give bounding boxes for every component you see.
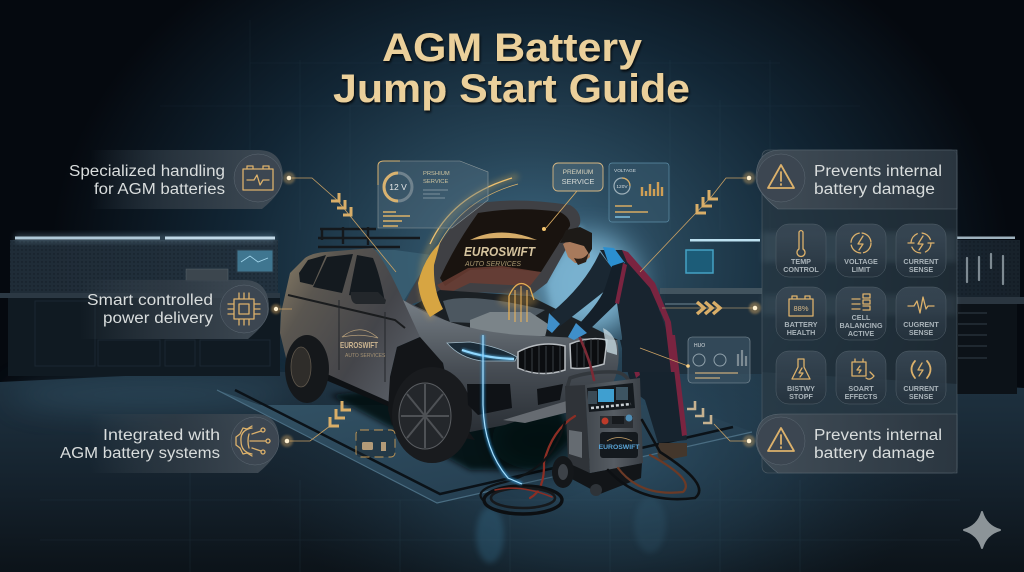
callout: prevents damage top: Prevents internal <box>814 163 942 180</box>
grille <box>518 339 607 374</box>
callout: integrated with systems: Integrated with <box>103 427 220 444</box>
tile: distway stop: STOPF <box>789 392 814 401</box>
boot <box>658 443 687 461</box>
HUD: 12 V gauge: PRSHIUM <box>423 171 450 177</box>
gold energy swirl over the battery <box>498 284 538 322</box>
glowing blue cable <box>483 335 522 484</box>
front right highlight <box>603 328 617 355</box>
back glow behind the hood <box>542 235 638 335</box>
tile: smart effects: EFFECTS <box>845 392 878 401</box>
connector: top left <box>283 172 396 272</box>
tile: distway stop <box>776 351 826 404</box>
raised hood <box>403 200 580 307</box>
callout: smart controlled power: Smart controlled <box>87 292 213 309</box>
raised hood: AUTO SERVICES <box>464 261 521 268</box>
tile: smart effects <box>836 351 886 404</box>
tile: voltage limit: VOLTAGE <box>844 257 878 266</box>
callout: integrated with systems <box>60 414 279 473</box>
panel: protections <box>756 150 957 473</box>
callout: prevents damage bottom: Prevents internal <box>814 427 942 444</box>
connector: bottom right <box>687 401 755 447</box>
torso <box>600 250 675 372</box>
background: floor <box>0 372 1024 572</box>
handle <box>567 372 630 388</box>
HUD: premium service: PREMIUM <box>563 169 593 176</box>
icon: warning triangle <box>757 154 805 202</box>
engine bay <box>403 290 618 345</box>
head <box>563 241 590 263</box>
gloves <box>547 313 560 333</box>
tile: temp control: TEMP <box>791 257 811 266</box>
sill step <box>316 370 392 408</box>
car shadow <box>330 385 570 470</box>
car <box>280 200 619 463</box>
tile: current sense bolt <box>896 351 946 404</box>
floor platform <box>217 390 752 503</box>
callout: prevents damage bottom: battery damage <box>814 445 935 462</box>
tile: current sense bolt: CURRENT <box>903 384 939 393</box>
tile: distway stop: BISTWY <box>787 384 815 393</box>
cables <box>480 338 699 514</box>
callout: prevents damage top: battery damage <box>814 181 935 198</box>
rear wheel <box>285 335 329 403</box>
tile: temp control: CONTROL <box>783 265 819 274</box>
tile: current sense 1 <box>896 224 946 277</box>
jump starter unit: EUROSWIFT <box>599 444 640 451</box>
side trim <box>288 295 405 328</box>
headlight <box>447 342 517 361</box>
connector: mid right <box>662 302 761 314</box>
tile: cell balancing: ACTIVE <box>848 329 874 338</box>
mechanic <box>547 227 687 461</box>
unit side face <box>565 385 590 473</box>
tile: voltage limit: LIMIT <box>852 265 871 274</box>
HUD: 12 V gauge: 12 V <box>389 182 407 192</box>
icon: battery <box>234 154 282 202</box>
HUD: lower right <box>688 337 750 383</box>
raised hood: EUROSWIFT <box>464 245 536 259</box>
front wheel <box>392 367 472 463</box>
connector: premium service to hood <box>542 191 577 231</box>
callout: integrated with systems: AGM battery systems <box>60 445 220 462</box>
title: AGM Battery <box>382 26 643 70</box>
HUD: 12 V gauge <box>378 161 488 228</box>
icon: sparkle watermark <box>964 512 1000 548</box>
icon: gear network <box>231 417 279 465</box>
brand label <box>600 432 638 458</box>
tile: battery health: BATTERY <box>784 320 818 329</box>
jump starter unit <box>552 372 643 496</box>
wheel arch and flare <box>388 337 475 440</box>
tile: current sense 1: SENSE <box>909 265 933 274</box>
tile: battery health: 88% <box>793 304 809 313</box>
connector: bottom left <box>281 401 351 447</box>
glowing gold arc <box>418 176 518 318</box>
vent <box>569 430 582 458</box>
background: left workbench <box>0 234 280 376</box>
tile: temp control <box>776 224 826 277</box>
connector: lower right hud <box>640 348 690 368</box>
callout: specialized handling: for AGM batteries <box>94 181 225 198</box>
tile: cell balancing: BALANCING <box>839 321 883 330</box>
tile: current sense pulse: SENSE <box>909 328 933 337</box>
HUD: 12 V gauge: SERVICE <box>423 179 448 185</box>
HUD: voltage panel <box>609 163 669 222</box>
roof rack <box>318 227 420 247</box>
connector: mid left <box>271 304 292 314</box>
tile: current sense 1: CURRENT <box>903 257 939 266</box>
HUD: small floor icon <box>356 430 395 457</box>
title <box>333 26 690 111</box>
side windows <box>299 254 385 302</box>
callout: prevents damage bottom <box>756 414 957 473</box>
body side <box>280 248 470 405</box>
icon: chip <box>220 285 268 333</box>
unit front face <box>585 378 643 473</box>
lower bumper <box>467 384 512 415</box>
tile: smart effects: SOART <box>848 384 874 393</box>
tile: voltage limit <box>836 224 886 277</box>
windscreen <box>373 250 432 302</box>
tile: current sense bolt: SENSE <box>909 392 933 401</box>
background: right workbench <box>660 236 1024 394</box>
battery <box>470 312 548 337</box>
door logo <box>340 330 386 359</box>
tile: battery health <box>776 287 826 340</box>
wheel <box>552 456 574 488</box>
HUD: premium service: SERVICE <box>562 177 594 186</box>
tile: battery health: HEALTH <box>787 328 815 337</box>
title: Jump Start Guide <box>333 67 690 111</box>
door logo: EUROSWIFT <box>340 340 379 350</box>
tile: current sense pulse: CUGRENT <box>903 320 939 329</box>
tile: cell balancing: CELL <box>852 313 871 322</box>
legs <box>620 335 687 443</box>
door logo: AUTO SERVICES <box>345 353 386 359</box>
callout: specialized handling: Specialized handling <box>69 163 225 180</box>
HUD: voltage panel: VOLTAGE <box>614 168 636 174</box>
HUD: premium service <box>553 163 603 191</box>
screen panel <box>587 383 635 412</box>
callout: smart controlled power <box>80 280 269 339</box>
callout: smart controlled power: power delivery <box>103 310 213 327</box>
arms <box>551 252 612 327</box>
icon: warning triangle <box>757 417 805 465</box>
unit dark base <box>568 462 642 494</box>
callout: prevents damage top <box>756 150 957 209</box>
connector: top right <box>640 172 755 272</box>
tile: cell balancing <box>836 287 886 340</box>
tile: current sense pulse <box>896 287 946 340</box>
callout: specialized handling <box>69 150 283 209</box>
front end <box>403 300 619 432</box>
HUD: lower right: HUO <box>694 343 705 349</box>
HUD: voltage panel: 120V <box>616 184 628 190</box>
